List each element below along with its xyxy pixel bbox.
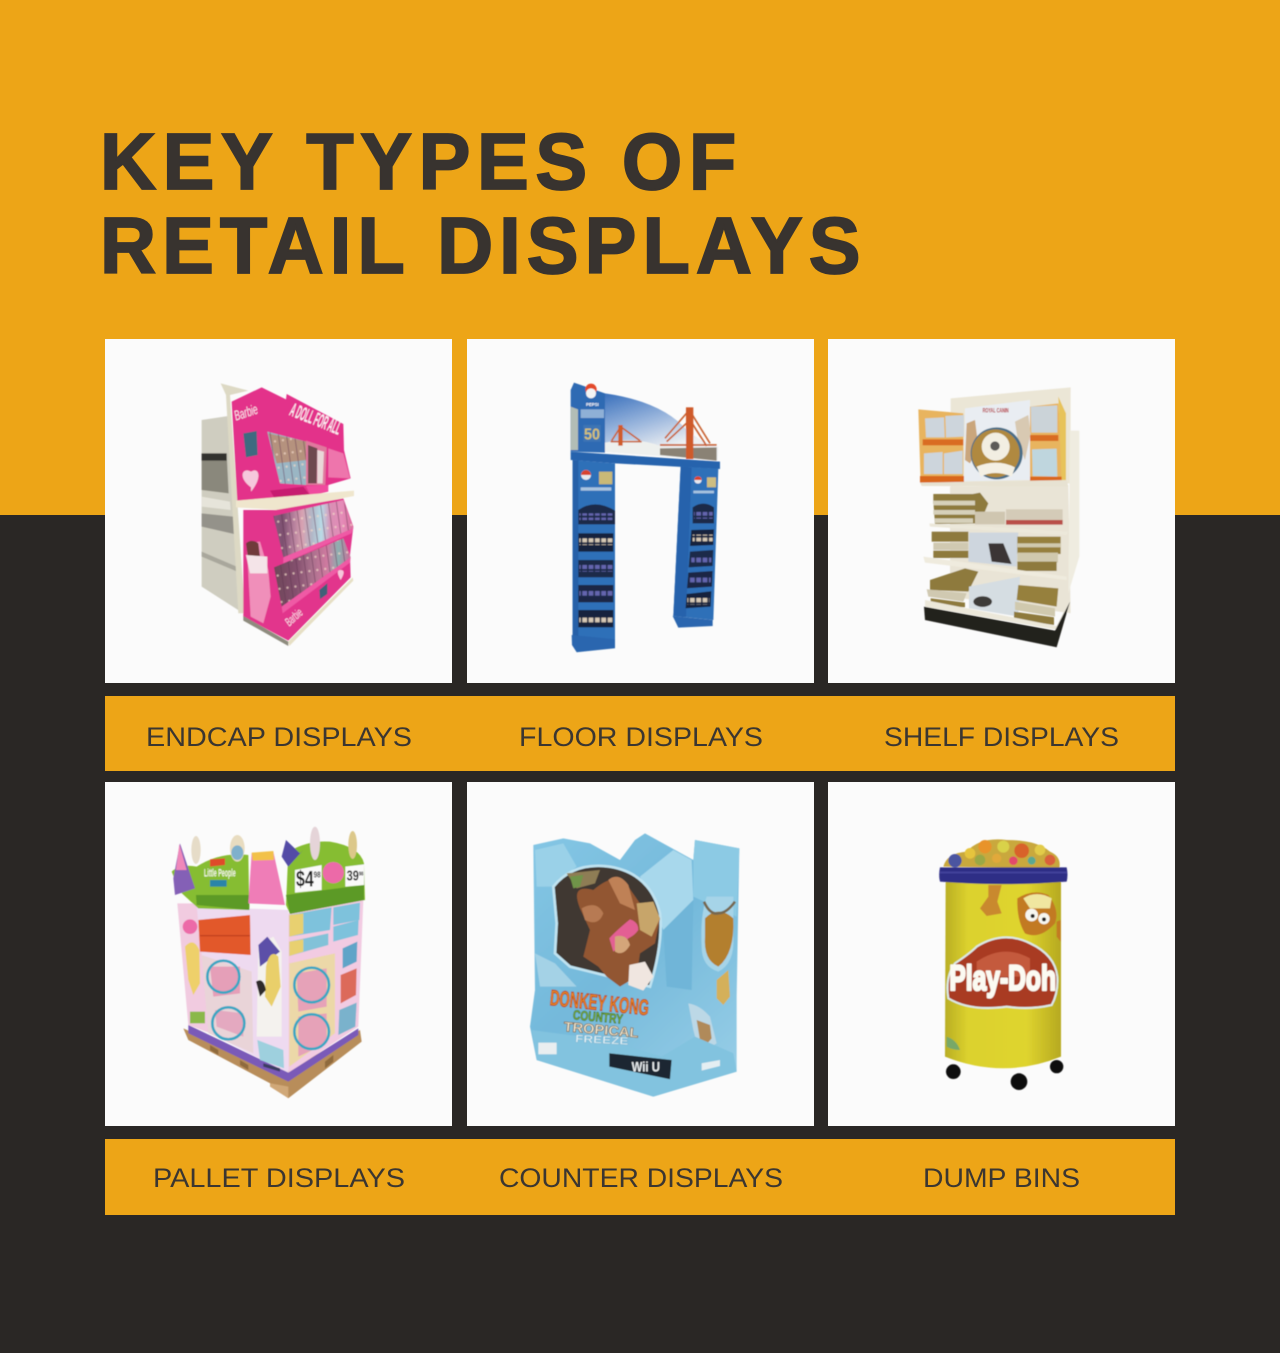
panel: shelf display <box>828 339 1175 683</box>
title: KEY TYPES OF <box>100 117 736 206</box>
panel: dump bin <box>828 782 1175 1126</box>
icon: Play-Doh dump bin <box>939 839 1067 1090</box>
caption: shelf displays: SHELF DISPLAYS <box>884 722 1119 752</box>
panel: floor display <box>467 339 814 683</box>
icon: Donkey Kong counter display <box>530 833 739 1097</box>
caption: endcap displays: ENDCAP DISPLAYS <box>146 722 412 752</box>
icon: pink and green pallet display: 98 <box>359 871 363 877</box>
panel: endcap display: A DOLL FOR ALL <box>287 400 344 440</box>
icon: pink endcap display: Barbie <box>232 401 260 424</box>
icon: pink and green pallet display: Little People <box>204 868 236 880</box>
title <box>100 117 860 290</box>
caption: floor displays: FLOOR DISPLAYS <box>519 722 763 752</box>
icon: pink endcap display <box>202 383 354 646</box>
panel: endcap display <box>105 339 452 683</box>
icon: blue Pepsi floor arch: PEPSI <box>586 402 599 407</box>
icon: blue Pepsi floor arch: 50 <box>584 426 600 443</box>
icon: Donkey Kong counter display: Wii U <box>632 1059 660 1075</box>
icon: Play-Doh dump bin: Play-Doh <box>949 959 1056 998</box>
background: dark bottom band <box>0 515 1280 1353</box>
icon: pink and green pallet display: 39 <box>347 869 363 885</box>
icon: pink and green pallet display <box>172 827 365 1098</box>
caption bar: top row <box>105 696 1175 771</box>
background: yellow top band <box>0 0 1280 515</box>
icon: pink and green pallet display: 98 <box>314 869 321 879</box>
caption: pallet displays: PALLET DISPLAYS <box>153 1163 405 1193</box>
icon: Donkey Kong counter display: DONKEY KONG <box>549 985 650 1020</box>
icon: pink and green pallet display: $4 <box>296 867 320 892</box>
caption: counter displays: COUNTER DISPLAYS <box>499 1163 783 1193</box>
panel: pallet display <box>105 782 452 1126</box>
caption bar: bottom row <box>105 1139 1175 1215</box>
title: RETAIL DISPLAYS <box>100 201 860 290</box>
icon: dog food shelf display: ROYAL CANIN <box>983 408 1009 415</box>
icon: pink endcap display: Barbie <box>282 605 306 629</box>
icon: Donkey Kong counter display: FREEZE <box>575 1033 629 1048</box>
panel: counter display <box>467 782 814 1126</box>
icon: Donkey Kong counter display: TROPICAL <box>563 1019 639 1041</box>
caption: dump bins: DUMP BINS <box>923 1163 1080 1193</box>
icon: Donkey Kong counter display: COUNTRY <box>572 1007 624 1027</box>
icon: dog food shelf display <box>918 387 1079 647</box>
icon: blue Pepsi floor arch <box>571 383 720 652</box>
